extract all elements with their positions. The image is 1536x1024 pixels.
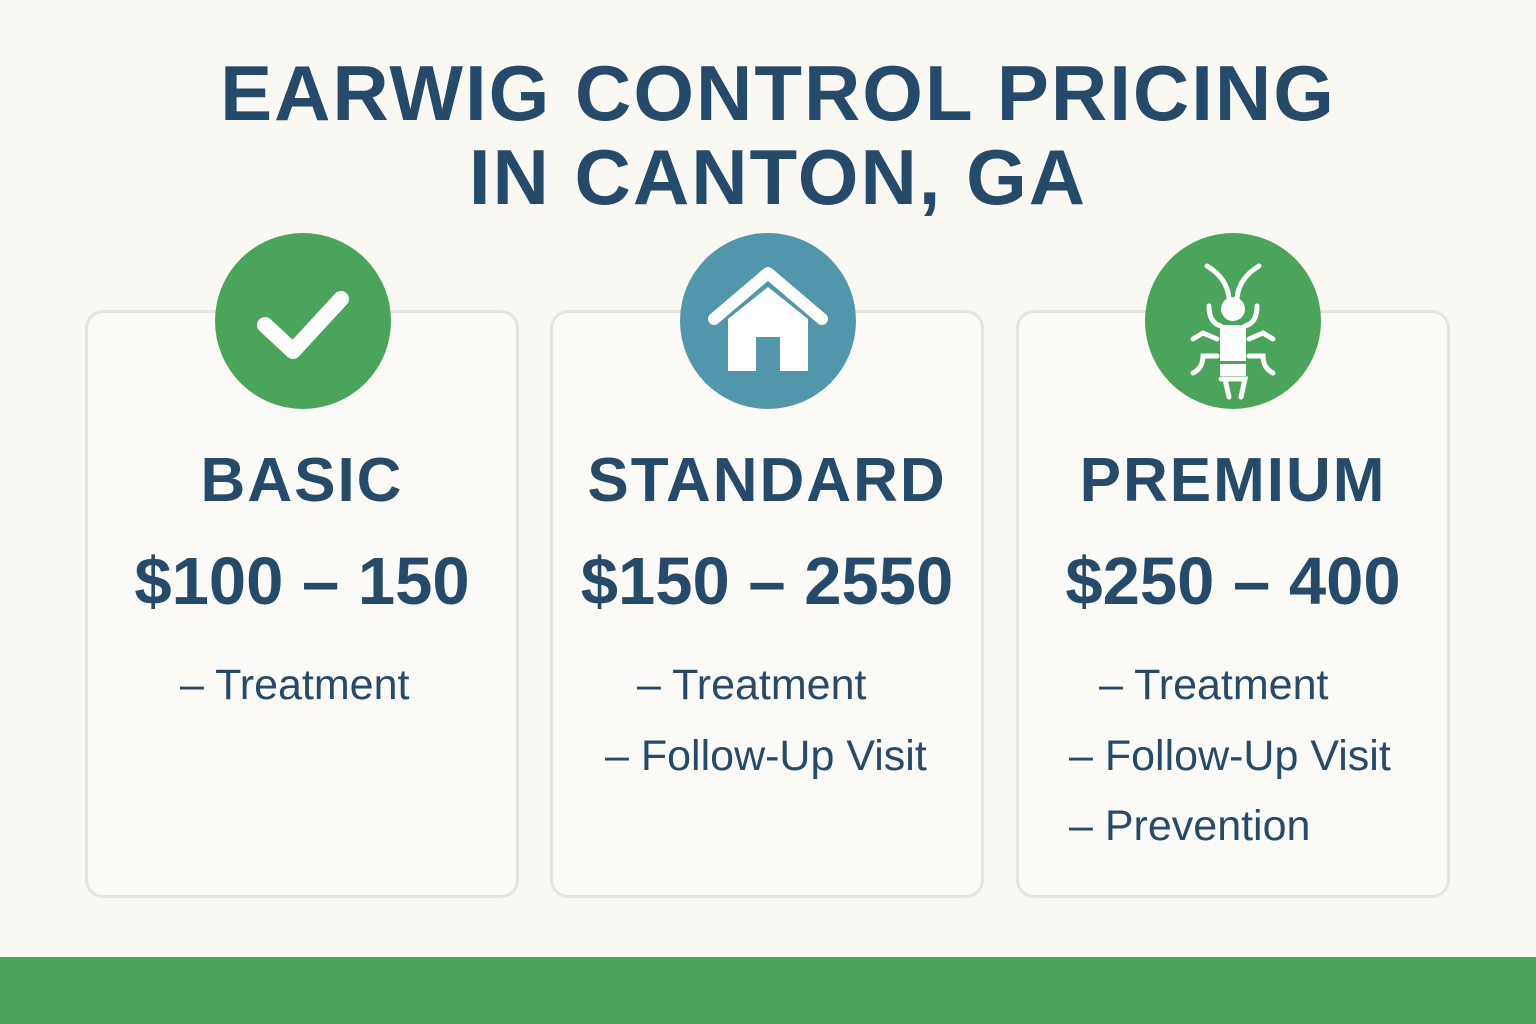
panel: basic	[85, 310, 519, 898]
title	[220, 49, 1336, 221]
icon: earwig	[1145, 233, 1321, 409]
bullet list: basic: – Treatment	[180, 661, 409, 709]
heading: basic: BASIC	[201, 446, 403, 515]
footer bar	[0, 957, 1536, 1024]
heading: premium: PREMIUM	[1080, 446, 1386, 515]
panel: standard	[550, 310, 984, 898]
bullet list: premium: – Prevention	[1069, 802, 1310, 850]
bullet list: premium	[1069, 661, 1391, 850]
title: EARWIG CONTROL PRICING	[220, 49, 1336, 137]
bullet list: standard: – Follow-Up Visit	[605, 732, 927, 780]
bullet list: standard	[605, 661, 927, 780]
heading: standard: STANDARD	[587, 446, 947, 515]
panel: premium	[1016, 310, 1450, 898]
bullet list: premium: – Follow-Up Visit	[1069, 732, 1391, 780]
title: IN CANTON, GA	[469, 133, 1087, 221]
price: standard: $150 – 2550	[581, 544, 953, 619]
price: basic: $100 – 150	[134, 544, 470, 619]
price: premium: $250 – 400	[1065, 544, 1401, 619]
icon: checkmark	[215, 233, 391, 409]
icon: house	[680, 233, 856, 409]
bullet list: standard: – Treatment	[637, 661, 866, 709]
bullet list: premium: – Treatment	[1099, 661, 1328, 709]
